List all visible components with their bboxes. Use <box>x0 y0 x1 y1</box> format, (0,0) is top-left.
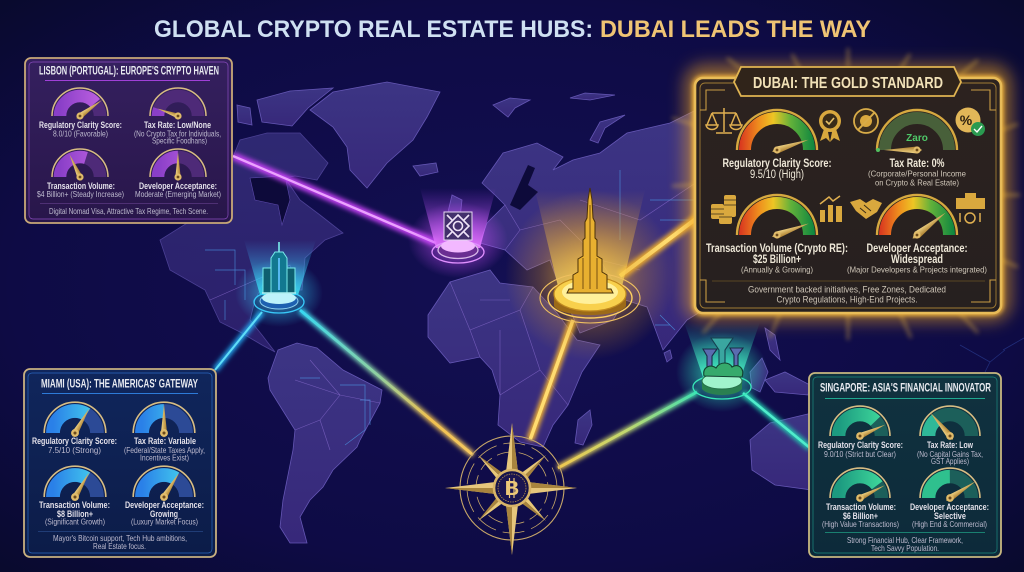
labels: tax rate: (No Capital Gains Tax, <box>917 450 983 459</box>
labels: tax rate <box>124 435 205 462</box>
labels: tax rate: Tax Rate: Variable <box>134 435 196 446</box>
panel frame <box>695 67 1001 313</box>
footer text: Tech Savvy Population. <box>871 544 939 553</box>
labels: regulatory clarity <box>32 435 117 455</box>
gauge: developer acceptance <box>150 149 206 181</box>
labels: transaction volume <box>706 243 848 274</box>
panel frame <box>24 369 216 557</box>
icon: percent check <box>956 108 985 136</box>
icon: award badge <box>819 110 841 142</box>
beam: Lisbon to panel <box>233 156 436 243</box>
heading: MIAMI (USA): THE AMERICAS' GATEWAY <box>41 378 198 390</box>
beam: Miami to panel <box>215 312 262 370</box>
labels: tax rate: Incentives Exist) <box>140 454 189 462</box>
footer text <box>748 284 946 304</box>
labels: developer acceptance: (Major Developers & Projects integrated) <box>847 264 987 274</box>
gauge: tax rate <box>920 406 980 442</box>
labels: regulatory clarity: 7.5/10 (Strong) <box>48 446 101 455</box>
gauge: transaction volume <box>52 149 108 182</box>
panel frame <box>25 58 232 223</box>
labels: tax rate: (Corporate/Personal Income <box>868 168 966 178</box>
labels: regulatory clarity: Regulatory Clarity Score: <box>818 439 903 450</box>
labels: developer acceptance: (High End & Commercial) <box>912 520 987 529</box>
gauge: transaction volume <box>830 468 890 503</box>
labels: transaction volume <box>822 501 899 529</box>
labels: tax rate: Tax Rate: Low/None <box>144 119 211 130</box>
labels: tax rate: GST Applies) <box>931 457 969 466</box>
gauge: regulatory clarity <box>44 402 106 438</box>
labels: tax rate: Tax Rate: Low <box>927 439 974 450</box>
gauge: developer acceptance <box>133 466 195 502</box>
labels: tax rate <box>868 158 966 188</box>
footer text: Crypto Regulations, High-End Projects. <box>776 294 918 304</box>
gauge: regulatory clarity <box>830 406 890 440</box>
gauge: transaction volume <box>44 466 106 502</box>
labels: transaction volume: Transaction Volume: <box>39 499 110 510</box>
footer text: Mayor's Bitcoin support, Tech Hub ambitions, <box>53 534 187 543</box>
beam: Dubai to compass <box>530 320 573 440</box>
icon: no-tax coin <box>854 109 878 133</box>
icon: scales <box>706 108 742 133</box>
labels: regulatory clarity: Regulatory Clarity Score: <box>32 435 117 446</box>
world map <box>160 82 1024 543</box>
icon: growth chart <box>820 196 842 222</box>
labels: regulatory clarity: 8.0/10 (Favorable) <box>53 130 108 138</box>
labels: regulatory clarity: Regulatory Clarity Score: <box>722 158 832 170</box>
gauge: tax rate: Zaro <box>906 133 928 144</box>
icon: buildings and key <box>956 193 985 223</box>
icon: percent check: % <box>960 112 973 128</box>
heading: DUBAI: THE GOLD STANDARD <box>753 75 943 92</box>
heading: LISBON (PORTUGAL): EUROPE'S CRYPTO HAVEN <box>39 66 219 78</box>
labels: regulatory clarity: 9.5/10 (High) <box>750 169 804 181</box>
labels: developer acceptance: Developer Acceptance: <box>125 499 204 510</box>
labels: tax rate: Tax Rate: 0% <box>890 158 944 170</box>
labels: tax rate: (No Crypto Tax for Individuals, <box>134 130 221 138</box>
node: Lisbon tile monument <box>408 188 508 278</box>
gauge: developer acceptance <box>877 195 957 242</box>
labels: transaction volume: Transaction Volume (Crypto RE): <box>706 243 848 255</box>
labels: tax rate: (Federal/State Taxes Apply, <box>124 446 205 455</box>
gauge: tax rate <box>876 110 957 154</box>
title: GLOBAL CRYPTO REAL ESTATE HUBS: <box>154 16 593 43</box>
gauge: regulatory clarity <box>52 88 108 121</box>
icon: handshake <box>850 199 882 219</box>
labels: tax rate: Specific Foodhans) <box>152 136 207 146</box>
labels: developer acceptance <box>910 501 989 529</box>
gauge: tax rate <box>150 88 206 120</box>
labels: developer acceptance: Selective <box>934 510 966 521</box>
labels: tax rate: on Crypto & Real Estate) <box>875 178 959 188</box>
icon: coin stacks <box>711 195 736 224</box>
panel: Singapore <box>809 373 1001 557</box>
labels: regulatory clarity <box>39 119 122 138</box>
footer text: Real Estate focus. <box>93 542 146 551</box>
beam: Dubai to panel <box>620 218 697 276</box>
labels: developer acceptance: Widespread <box>891 254 943 266</box>
compass with bitcoin <box>445 423 577 555</box>
labels: developer acceptance: Growing <box>150 508 178 519</box>
title: DUBAI LEADS THE WAY <box>600 16 871 43</box>
labels: developer acceptance <box>135 180 221 199</box>
beam: Singapore to panel <box>743 393 810 448</box>
dubai panel glow and rays <box>672 48 1020 340</box>
labels: transaction volume: $6 Billion+ <box>843 510 878 521</box>
labels: developer acceptance: Developer Acceptance: <box>139 180 217 191</box>
labels: transaction volume: $8 Billion+ <box>57 508 93 519</box>
compass with bitcoin: B <box>505 478 519 500</box>
panel: Miami <box>24 369 216 557</box>
panel: Dubai <box>695 67 1001 313</box>
beam: Singapore to compass <box>558 392 697 468</box>
node: Singapore supertrees <box>676 322 768 412</box>
labels: regulatory clarity: 9.0/10 (Strict but Clear) <box>824 450 896 459</box>
node: Dubai tower <box>505 188 675 360</box>
gauge: transaction volume <box>737 195 817 240</box>
labels: transaction volume: $4 Billion+ (Steady Increase) <box>37 190 124 199</box>
footer text: Strong Financial Hub, Clear Framework, <box>847 536 963 545</box>
labels: transaction volume: Transaction Volume: <box>826 501 896 512</box>
gauge: developer acceptance <box>920 468 980 503</box>
footer text <box>53 534 187 551</box>
labels: developer acceptance: Developer Acceptance: <box>866 243 968 255</box>
node: Miami skyscraper <box>235 240 323 327</box>
labels: developer acceptance <box>847 243 987 274</box>
labels: transaction volume: $25 Billion+ <box>753 254 801 266</box>
panel: Lisbon <box>25 58 232 223</box>
labels: transaction volume <box>39 499 110 526</box>
labels: transaction volume: (High Value Transactions) <box>822 520 899 529</box>
labels: regulatory clarity: Regulatory Clarity Score: <box>39 119 122 130</box>
labels: transaction volume: (Significant Growth) <box>45 518 105 526</box>
labels: developer acceptance: (Luxury Market Focus) <box>131 518 198 526</box>
labels: developer acceptance: Moderate (Emerging Market) <box>135 190 221 199</box>
labels: transaction volume: (Annually & Growing) <box>741 264 813 274</box>
labels: tax rate <box>134 119 221 146</box>
labels: transaction volume <box>37 180 124 199</box>
labels: regulatory clarity <box>722 158 832 181</box>
gauge: regulatory clarity <box>737 110 817 155</box>
footer text: Digital Nomad Visa, Attractive Tax Regime, Tech Scene. <box>49 207 208 216</box>
title <box>154 16 871 43</box>
footer text: Government backed initiatives, Free Zones, Dedicated <box>748 284 946 294</box>
beam: Miami to compass <box>300 310 473 455</box>
labels: regulatory clarity <box>818 439 903 459</box>
labels: developer acceptance: Developer Acceptance: <box>910 501 989 512</box>
labels: tax rate <box>917 439 983 466</box>
panel frame <box>809 373 1001 557</box>
labels: developer acceptance <box>125 499 204 526</box>
labels: transaction volume: Transaction Volume: <box>47 180 115 191</box>
footer text <box>847 536 963 553</box>
gauge: tax rate <box>133 402 195 437</box>
